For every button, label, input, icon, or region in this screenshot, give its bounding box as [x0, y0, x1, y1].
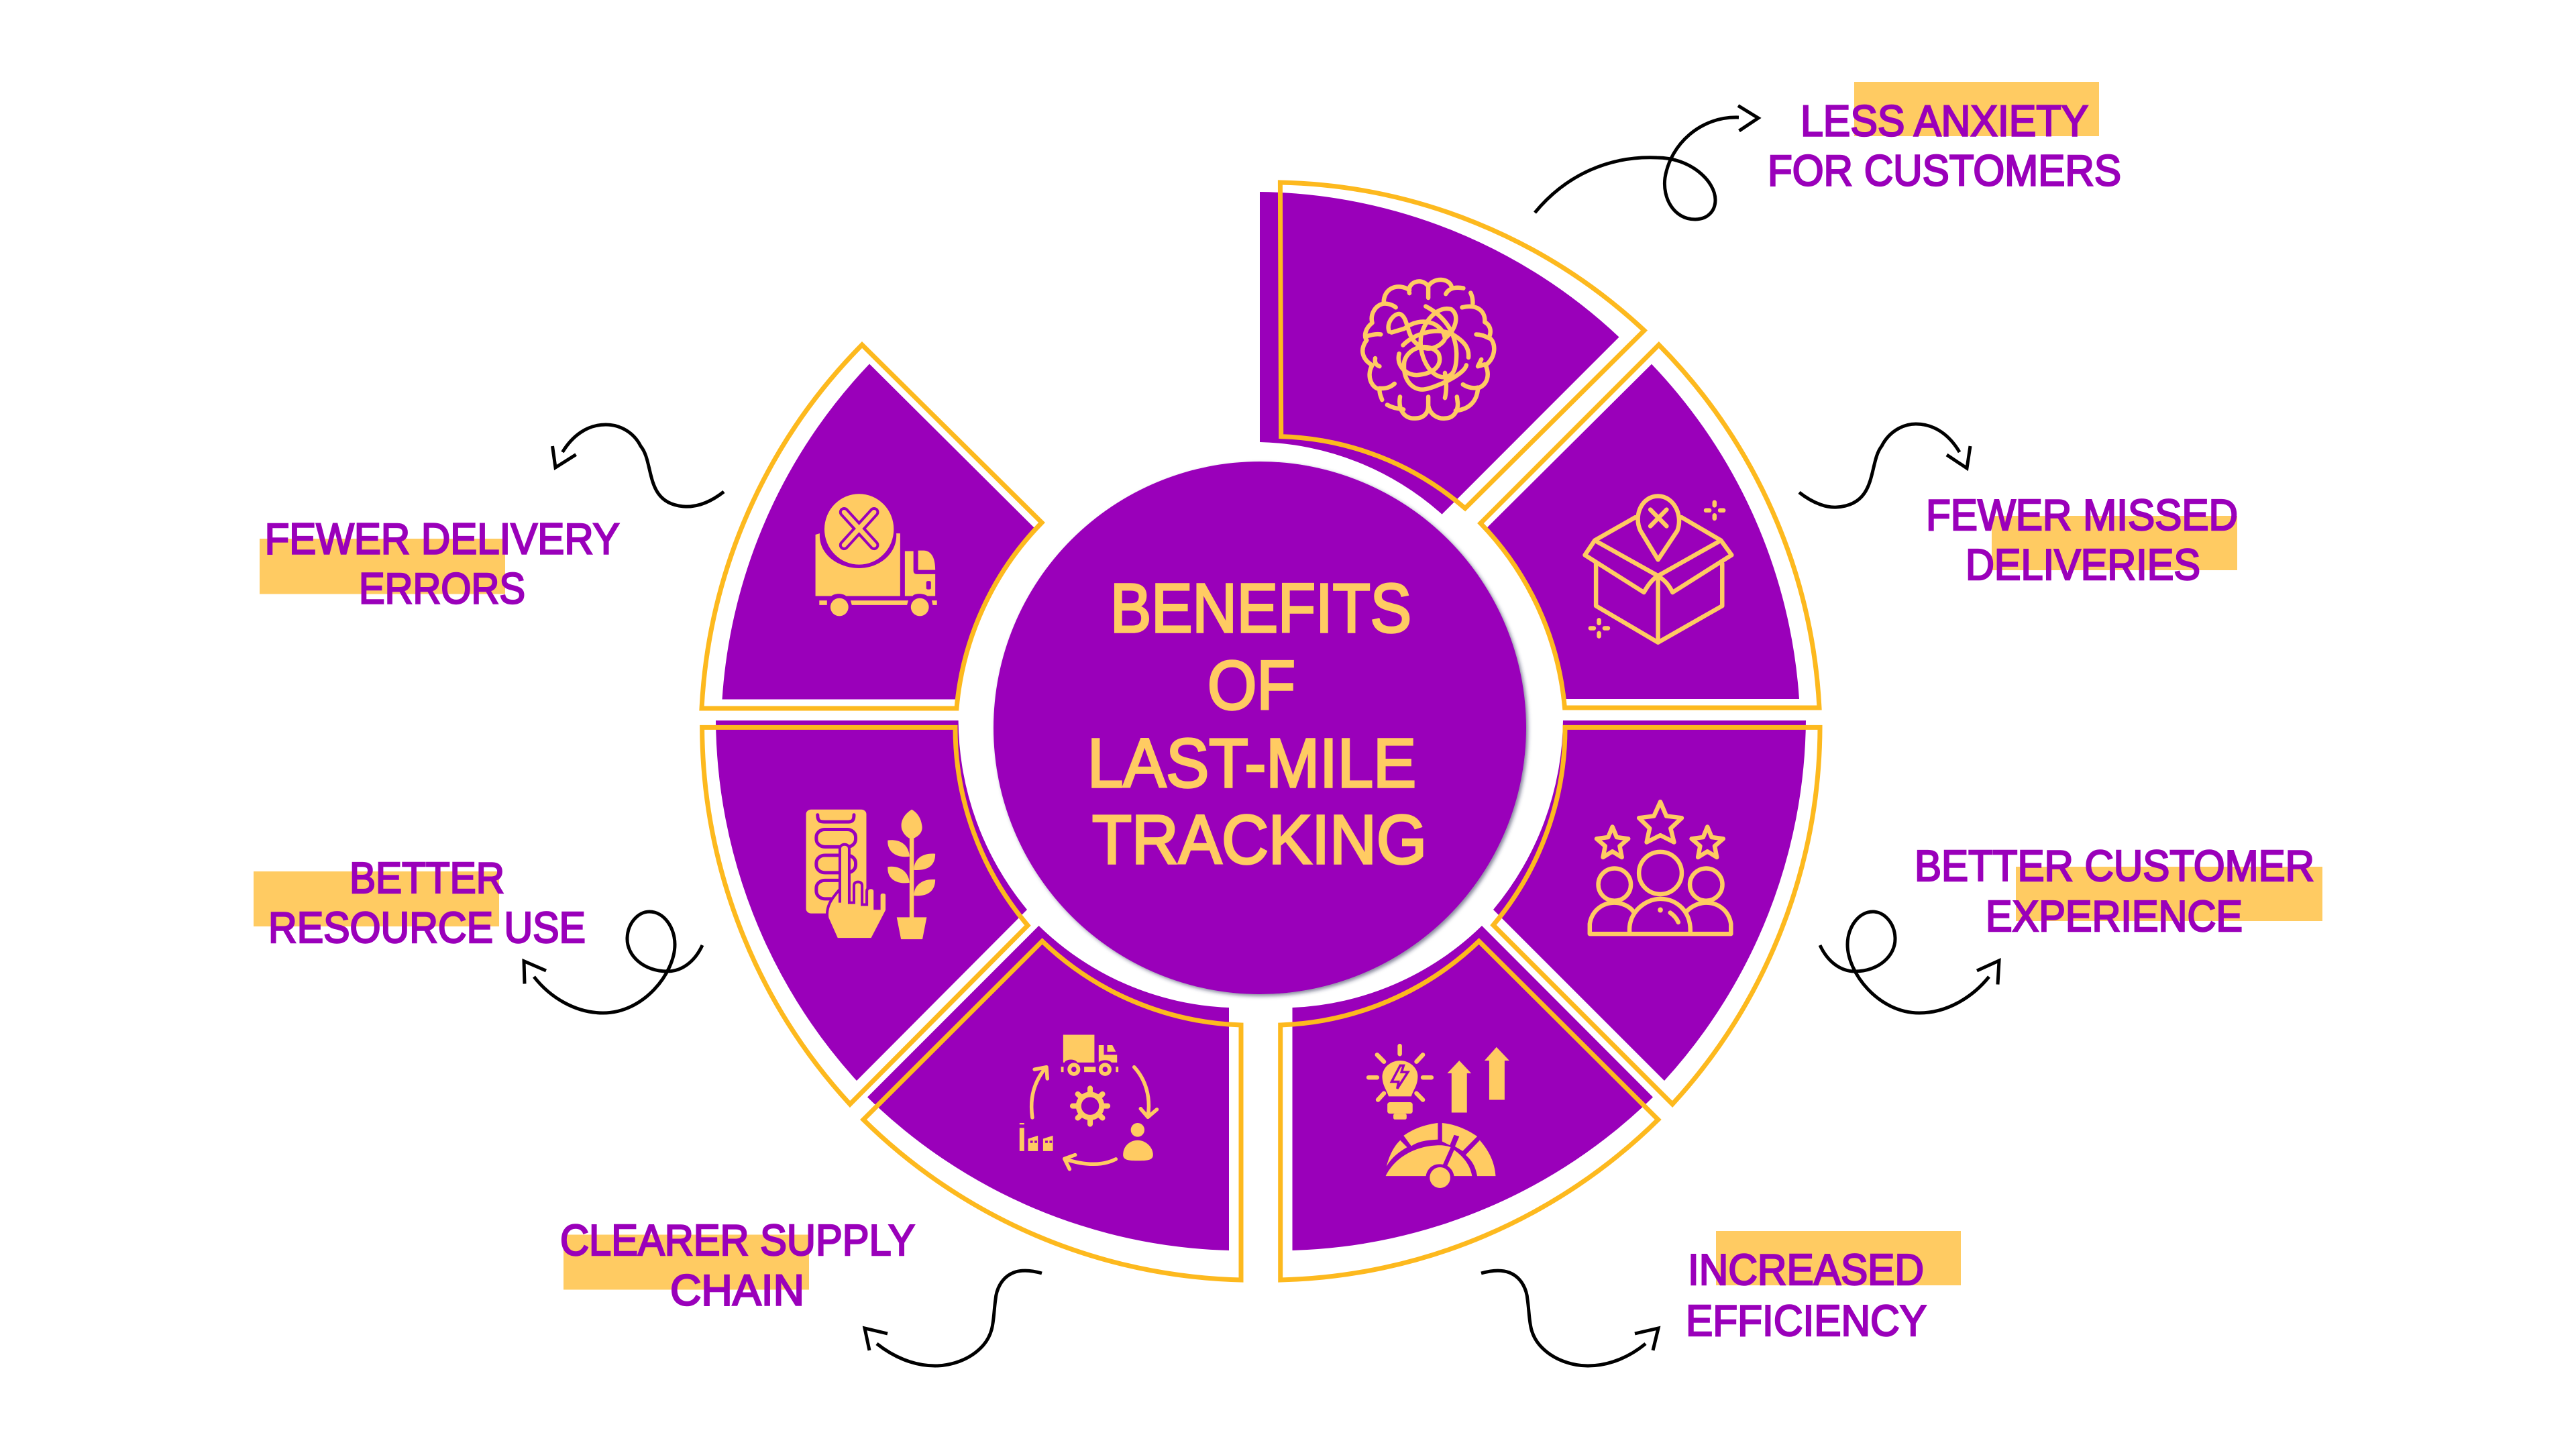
arrow: to better customer experience: [1820, 912, 1999, 1013]
segment fill: [722, 364, 1034, 699]
icon: open box with location pin: [1585, 496, 1731, 643]
segment outline: [702, 345, 1042, 708]
label: fewer missed deliveries: [1926, 490, 2238, 589]
label text: FOR CUSTOMERS: [1768, 146, 2121, 195]
highlight: [1716, 1231, 1961, 1285]
label: better customer experience: [1915, 841, 2322, 941]
panel: better customer experience segment: [1493, 720, 1820, 1104]
segment fill: [1260, 192, 1619, 515]
label text: [268, 853, 586, 952]
arrow: to clearer supply chain: [865, 1271, 1042, 1366]
label text: [265, 514, 620, 613]
segment fill: [1493, 720, 1806, 1081]
panel: fewer delivery errors segment: [702, 345, 1042, 708]
arrow: to increased efficiency: [1481, 1271, 1658, 1366]
highlight: [1854, 82, 2099, 136]
label text: CHAIN: [670, 1265, 804, 1315]
panel: increased efficiency segment: [1281, 926, 1658, 1280]
panel: clearer supply chain segment: [863, 926, 1241, 1280]
segment fill: [716, 720, 1027, 1081]
arrow: to better resource use: [524, 912, 702, 1013]
icon: bulb, arrows and gauge: [1368, 1046, 1509, 1188]
label text: [1915, 841, 2314, 941]
arrow: to less anxiety: [1535, 106, 1758, 219]
title: OF: [1208, 647, 1295, 724]
label text: EXPERIENCE: [1986, 892, 2243, 941]
icon: supply chain cycle: [1020, 1034, 1157, 1169]
center circle with title: [994, 462, 1526, 994]
panel: better resource use segment: [702, 720, 1028, 1104]
highlight: [260, 539, 505, 594]
icon: truck with cross: [816, 494, 937, 616]
highlight: [254, 871, 499, 926]
icon: hand on tablet and plant: [806, 810, 935, 939]
panel: less anxiety segment: [1260, 182, 1644, 515]
arrow: to fewer missed deliveries: [1799, 424, 1970, 507]
icon: tangled brain: [1362, 280, 1494, 419]
highlight: [2016, 867, 2322, 921]
title: TRACKING: [1092, 801, 1427, 878]
panel: fewer missed deliveries segment: [1481, 345, 1819, 708]
segment fill: [1487, 364, 1799, 699]
label text: INCREASED: [1688, 1245, 1924, 1294]
label: increased efficiency: [1686, 1231, 1961, 1345]
segment outline: [1481, 345, 1819, 708]
label text: ERRORS: [359, 564, 525, 613]
label: clearer supply chain: [560, 1216, 915, 1315]
label text: BETTER CUSTOMER: [1915, 841, 2314, 890]
label text: CLEARER SUPPLY: [560, 1216, 915, 1265]
highlight: [564, 1234, 809, 1289]
segment outline: [702, 727, 1028, 1104]
label text: EFFICIENCY: [1686, 1296, 1927, 1345]
label text: BETTER: [350, 853, 504, 902]
label text: FEWER DELIVERY: [265, 514, 620, 564]
label text: [560, 1216, 915, 1315]
title: BENEFITS: [1110, 570, 1411, 647]
segment fill: [1292, 926, 1653, 1250]
title: [1087, 570, 1427, 878]
center disc: [994, 462, 1526, 994]
label: better resource use: [254, 853, 586, 952]
segment outline: [1280, 182, 1644, 508]
segment outline: [1281, 941, 1658, 1280]
icon: people with stars: [1590, 802, 1731, 934]
label text: DELIVERIES: [1966, 540, 2200, 589]
label: fewer delivery errors: [260, 514, 620, 613]
label text: LESS ANXIETY: [1801, 96, 2088, 145]
label text: FEWER MISSED: [1926, 490, 2238, 539]
highlight: [1992, 516, 2237, 570]
label text: RESOURCE USE: [268, 903, 586, 952]
arrow: to fewer delivery errors: [553, 425, 724, 506]
segment outline: [1493, 727, 1820, 1104]
label: less anxiety for customers: [1768, 82, 2121, 195]
segment outline: [863, 941, 1241, 1280]
label text: [1926, 490, 2238, 589]
label text: [1686, 1245, 1927, 1345]
title: LAST-MILE: [1087, 724, 1416, 802]
label text: [1768, 96, 2121, 195]
segment fill: [867, 926, 1229, 1250]
